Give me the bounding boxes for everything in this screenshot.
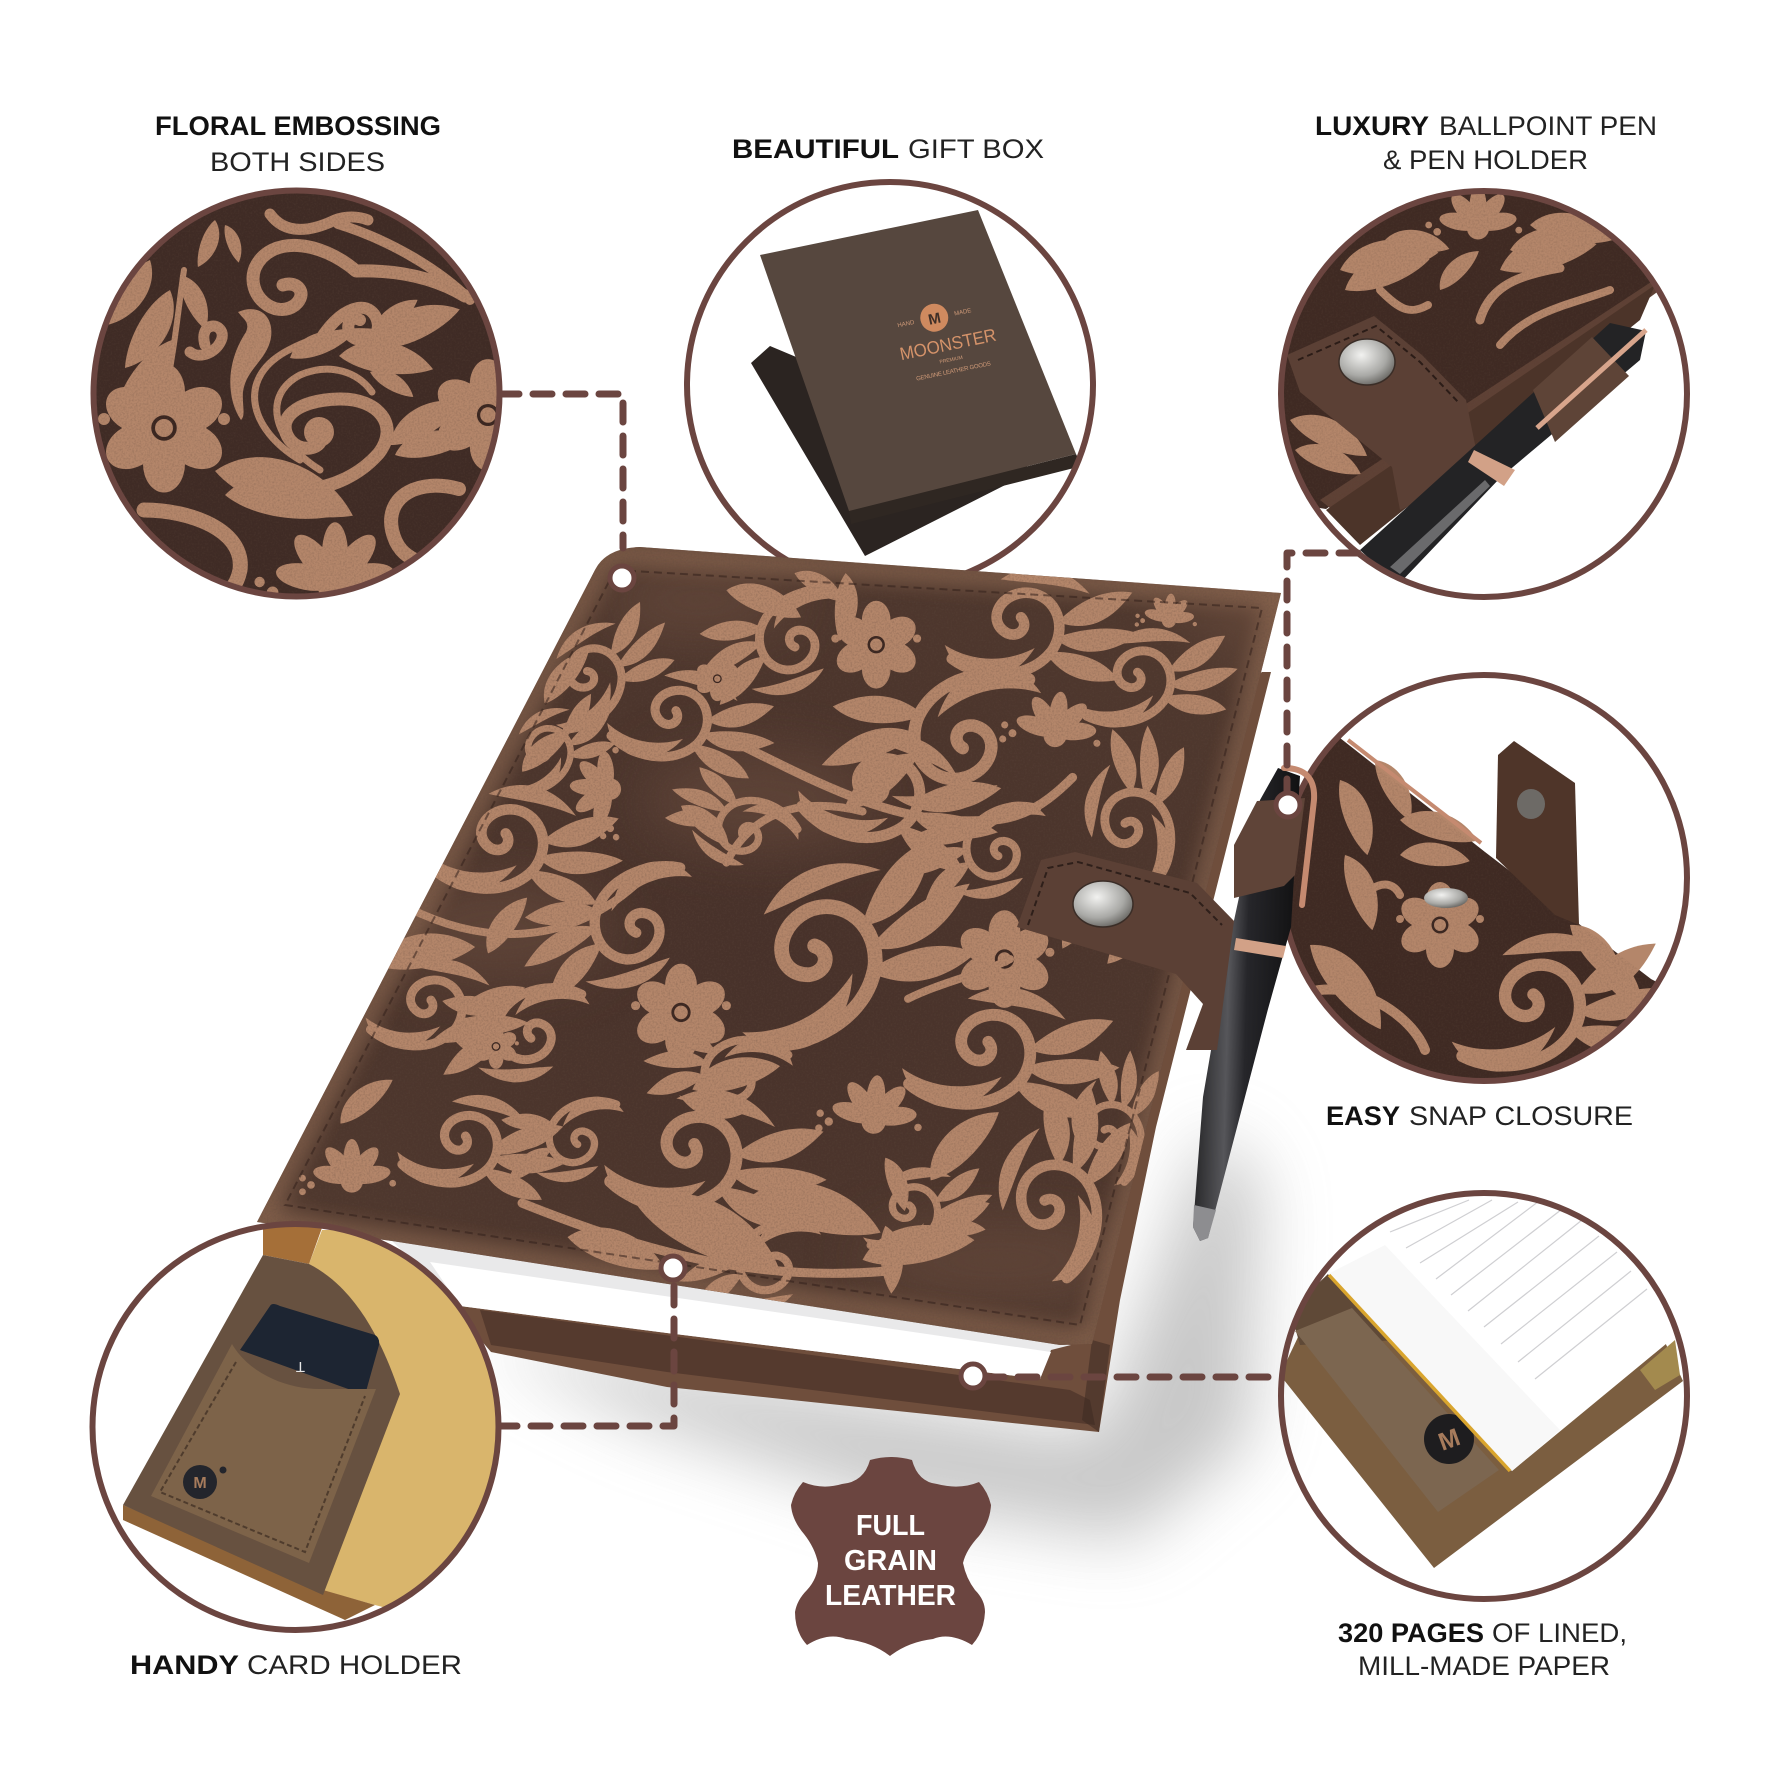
logo badge bbox=[1424, 1414, 1474, 1464]
back cover bbox=[430, 672, 1271, 1432]
badge: full grain leather: FULL bbox=[856, 1510, 925, 1542]
gift box lid bbox=[1003, 454, 1077, 486]
label: floral embossing: FLORAL EMBOSSING bbox=[155, 111, 441, 141]
pen clip on cover bbox=[1348, 740, 1481, 843]
panel: snap closure circle bbox=[1270, 675, 1690, 1090]
label: 320 pages bbox=[1338, 1618, 1627, 1681]
box logo: GENUINE LEATHER GOODS bbox=[916, 361, 991, 383]
pen band bbox=[1468, 450, 1515, 486]
panel: card holder circle: T bbox=[296, 1358, 305, 1375]
badge: full grain leather: GRAIN bbox=[844, 1545, 937, 1577]
pen holder loop bbox=[1533, 337, 1629, 442]
box logo: MOONSTER bbox=[898, 325, 998, 364]
pen barrel bbox=[1360, 323, 1646, 585]
panel: lined paper circle bbox=[1280, 1180, 1700, 1599]
page block bbox=[1328, 1180, 1700, 1471]
panel: card holder circle: M bbox=[193, 1475, 207, 1492]
panel: pen holder circle bbox=[1270, 180, 1690, 597]
front cover bbox=[257, 547, 1281, 1345]
marker dot: card holder bbox=[661, 1256, 685, 1280]
connector: pen holder bbox=[1287, 553, 1358, 795]
marker dot: paper bbox=[961, 1364, 985, 1388]
connector: floral embossing to cover bbox=[500, 394, 623, 548]
snap tab bbox=[1496, 741, 1579, 925]
pen loop bbox=[1234, 798, 1305, 898]
strap bbox=[1287, 316, 1481, 510]
embossed cover detail bbox=[1284, 194, 1650, 509]
badge: full grain leather bbox=[791, 1457, 991, 1656]
notebook drop shadow bbox=[480, 1130, 1260, 1540]
rose gold band bbox=[1234, 938, 1286, 958]
box logo bbox=[891, 292, 1002, 385]
panel: lined paper circle: M bbox=[1435, 1423, 1464, 1457]
pen clip bbox=[1537, 330, 1646, 428]
label: handy card holder: CARD HOLDER bbox=[247, 1650, 462, 1680]
inner white bbox=[320, 1228, 330, 1232]
embossed cover bbox=[1290, 738, 1656, 1078]
label: beautiful gift box: BEAUTIFUL bbox=[732, 134, 899, 164]
leather flap bbox=[123, 1255, 400, 1595]
label: handy card holder bbox=[130, 1650, 462, 1680]
snap socket bbox=[1517, 789, 1545, 819]
label: 320 pages: OF LINED, bbox=[1492, 1618, 1627, 1648]
label: easy snap closure: SNAP CLOSURE bbox=[1409, 1101, 1633, 1131]
gift box base bbox=[751, 346, 1027, 556]
box logo: MADE bbox=[954, 308, 972, 318]
inner leather flap bbox=[1295, 1308, 1499, 1512]
label: luxury ballpoint pen: BALLPOINT PEN bbox=[1439, 111, 1657, 141]
label: floral embossing: BOTH SIDES bbox=[210, 147, 385, 177]
pen tip bbox=[1193, 1205, 1216, 1241]
worn cover edge bbox=[257, 552, 1281, 1344]
page block bbox=[392, 1241, 1071, 1379]
leather spine edge bbox=[263, 1225, 323, 1264]
label: beautiful gift box: GIFT BOX bbox=[908, 134, 1044, 164]
label: handy card holder: HANDY bbox=[130, 1650, 239, 1680]
label: beautiful gift box bbox=[732, 134, 1044, 164]
rose gold clip bbox=[1284, 768, 1314, 905]
marker dot: pen holder bbox=[1276, 793, 1300, 817]
gilded page edge bbox=[1329, 1275, 1510, 1471]
label: luxury ballpoint pen bbox=[1315, 111, 1657, 175]
label: easy snap closure: EASY bbox=[1326, 1101, 1400, 1131]
logo badge bbox=[183, 1465, 217, 1499]
kraft corner bbox=[1640, 1340, 1680, 1390]
panel: notebook bbox=[250, 540, 1290, 1432]
pen bbox=[1193, 768, 1314, 1241]
label: 320 pages: MILL-MADE PAPER bbox=[1358, 1651, 1610, 1681]
label: floral embossing bbox=[155, 111, 441, 177]
label: luxury ballpoint pen: LUXURY bbox=[1315, 111, 1429, 141]
box logo: HAND bbox=[897, 320, 916, 329]
box logo: M bbox=[927, 310, 942, 329]
embossed floral pattern bbox=[299, 560, 1242, 1325]
leather grain bbox=[250, 540, 1290, 1350]
panel: floral embossing circle bbox=[90, 188, 502, 600]
worn leather patches bbox=[390, 560, 1140, 1300]
front pocket bbox=[151, 1344, 376, 1563]
panel: card holder circle bbox=[92, 1224, 510, 1640]
label: 320 pages: 320 PAGES bbox=[1338, 1618, 1484, 1648]
label: easy snap closure bbox=[1326, 1101, 1633, 1131]
snap button bbox=[1073, 881, 1133, 927]
cover stitching bbox=[285, 570, 1262, 1325]
label: luxury ballpoint pen: & PEN HOLDER bbox=[1383, 145, 1588, 175]
snap button bbox=[1339, 339, 1395, 385]
kraft endpaper bbox=[309, 1230, 510, 1640]
badge: full grain leather: LEATHER bbox=[825, 1580, 956, 1612]
snap stud bbox=[1424, 888, 1468, 908]
connector: card holder bbox=[498, 1280, 674, 1426]
black card bbox=[240, 1304, 379, 1395]
connector: lined paper bbox=[985, 1374, 1280, 1380]
snap strap bbox=[1017, 852, 1234, 1050]
marker dot: cover corner bbox=[610, 566, 634, 590]
leather base bbox=[1280, 1274, 1683, 1568]
box logo: PREMIUM bbox=[939, 355, 963, 365]
panel: beautiful gift box circle bbox=[687, 182, 1093, 588]
ruled lines bbox=[1390, 1192, 1647, 1379]
